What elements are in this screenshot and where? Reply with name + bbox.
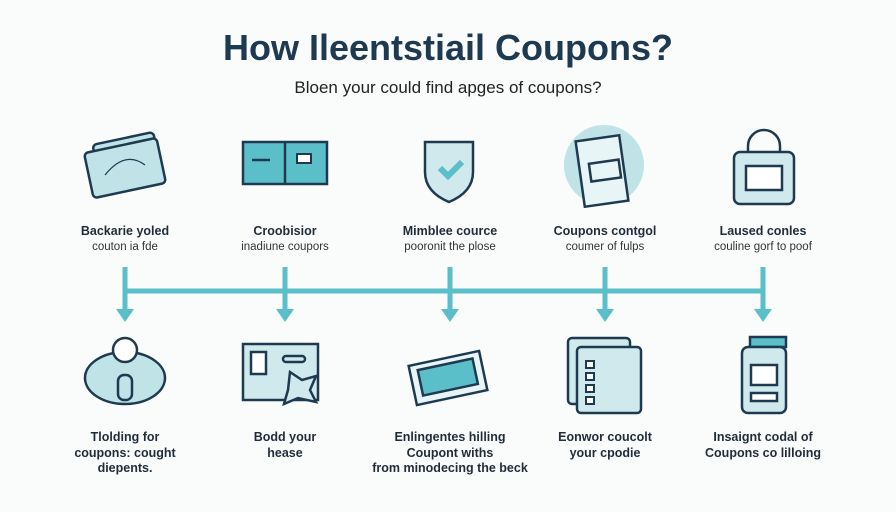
bottom label 3: Enlingentes hilling xyxy=(394,430,506,444)
label 4 xyxy=(554,224,656,252)
label 5: couline gorf to poof xyxy=(714,240,812,252)
label 5 xyxy=(714,224,812,252)
bottom label 2: hease xyxy=(267,446,303,460)
label 3 xyxy=(403,224,497,252)
bottom label 4: your cpodie xyxy=(570,446,640,460)
label 2: Croobisior xyxy=(253,224,317,238)
bottom label 4 xyxy=(558,430,652,460)
label 5: Laused conles xyxy=(720,224,806,238)
bottom label 4: Eonwor coucolt xyxy=(558,430,652,444)
label 1: Backarie yoled xyxy=(81,224,169,238)
icon: card xyxy=(84,132,166,198)
bottom label 3 xyxy=(372,430,528,475)
label 3: pooronit the plose xyxy=(404,240,496,252)
title: How Ileentstiail Coupons? xyxy=(223,27,673,68)
icon: tablet xyxy=(409,351,487,405)
icon: checklist xyxy=(568,338,641,413)
bottom label 2: Bodd your xyxy=(254,430,316,444)
label 2 xyxy=(241,224,329,252)
icon: book xyxy=(243,142,327,184)
bottom label 5: Coupons co lilloing xyxy=(705,446,821,460)
label 4: Coupons contgol xyxy=(554,224,656,238)
icon: board xyxy=(243,344,318,404)
bottom label 2 xyxy=(254,430,316,460)
bottom label 3: Coupont withs xyxy=(407,446,493,460)
bottom label 1: coupons: cought xyxy=(74,446,176,460)
icon: piggy xyxy=(85,338,165,404)
label 1 xyxy=(81,224,169,252)
icon: jar xyxy=(742,337,786,413)
bottom label 1 xyxy=(74,430,176,475)
bottom label 5: Insaignt codal of xyxy=(713,430,813,444)
label 2: inadiune coupors xyxy=(241,240,329,252)
subtitle: Bloen your could find apges of coupons? xyxy=(294,78,602,97)
icon: lock xyxy=(734,130,794,204)
connector lines xyxy=(116,267,772,322)
label 1: couton ia fde xyxy=(92,240,158,252)
icon: shield xyxy=(425,142,473,202)
label 4: coumer of fulps xyxy=(566,240,644,252)
label 3: Mimblee cource xyxy=(403,224,497,238)
icon: document circle xyxy=(564,125,644,207)
bottom label 5 xyxy=(705,430,821,460)
bottom label 1: diepents. xyxy=(98,461,152,475)
bottom label 3: from minodecing the beck xyxy=(372,461,528,475)
bottom label 1: Tlolding for xyxy=(91,430,159,444)
